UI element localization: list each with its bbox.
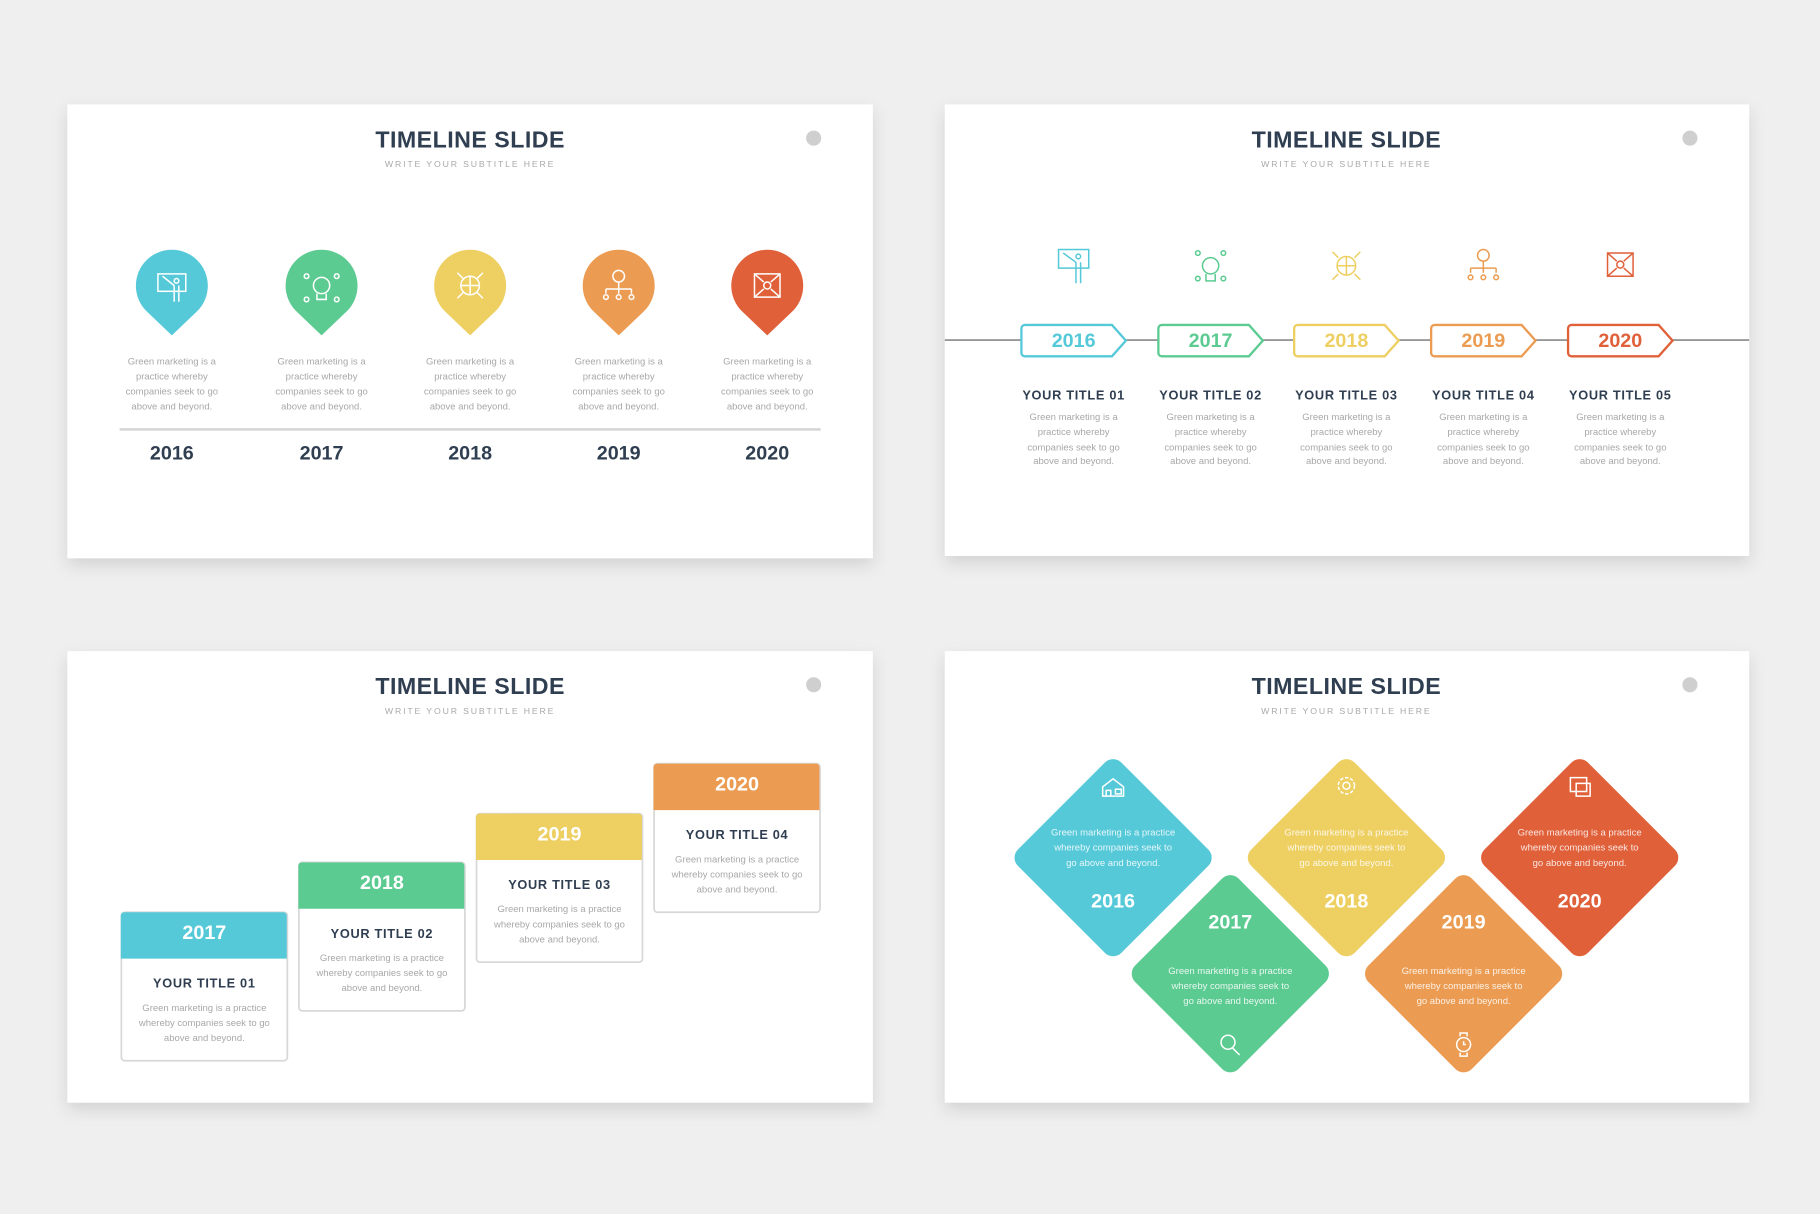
- step 2017: whereby companies seek to go: [138, 1018, 270, 1029]
- titles and descriptions: practice whereby: [1310, 427, 1383, 438]
- years: 2020: [745, 443, 789, 465]
- step 2019: Green marketing is a practice: [497, 904, 622, 915]
- descriptions: Green marketing is a: [575, 356, 663, 367]
- descriptions: above and beyond.: [430, 402, 511, 413]
- step 2019: YOUR TITLE 03: [508, 877, 611, 892]
- descriptions: companies seek to go: [424, 387, 516, 398]
- step 2017: 2017: [182, 922, 226, 944]
- diamond 2017: [1127, 870, 1334, 1077]
- step 2017: [121, 912, 287, 1061]
- panel: arrow tag timeline: 2020: [1598, 330, 1642, 352]
- diamond 2019: [1360, 870, 1567, 1077]
- year tags: [1021, 325, 1673, 356]
- pin 2018: [434, 250, 506, 335]
- step 2020: above and beyond.: [697, 885, 777, 896]
- titles and descriptions: Green marketing is a: [1167, 412, 1255, 423]
- descriptions: Green marketing is a: [426, 356, 515, 367]
- step 2019: above and beyond.: [519, 934, 600, 945]
- page number: [1682, 131, 1697, 146]
- titles and descriptions: Green marketing is a: [1439, 412, 1528, 423]
- subtitle: WRITE YOUR SUBTITLE HERE: [1261, 159, 1432, 169]
- titles and descriptions: Green marketing is a: [1302, 412, 1391, 423]
- titles and descriptions: companies seek to go: [1164, 442, 1257, 453]
- years: [150, 443, 789, 465]
- titles and descriptions: above and beyond.: [1033, 456, 1114, 467]
- titles and descriptions: YOUR TITLE 05: [1569, 387, 1672, 402]
- step 2019: [476, 814, 642, 962]
- titles and descriptions: companies seek to go: [1437, 442, 1530, 453]
- diamond 2017: whereby companies seek to: [1170, 981, 1289, 992]
- diamond 2019: go above and beyond.: [1417, 996, 1511, 1007]
- panel: arrow tag timeline: [945, 104, 1749, 556]
- descriptions: [126, 356, 813, 413]
- title: TIMELINE SLIDE: [375, 673, 565, 699]
- step 2018: [298, 862, 465, 1011]
- descriptions: Green marketing is a: [723, 356, 812, 367]
- step 2018: YOUR TITLE 02: [331, 926, 433, 941]
- years: 2016: [150, 443, 194, 465]
- title: TIMELINE SLIDE: [1252, 673, 1441, 699]
- descriptions: companies seek to go: [275, 387, 368, 398]
- panel: diamond timeline: [945, 651, 1749, 1103]
- diamond 2016: [1010, 754, 1217, 961]
- panel: arrow tag timeline: 2016: [1052, 330, 1096, 352]
- diamond 2020: go above and beyond.: [1533, 858, 1627, 869]
- step 2020: [654, 764, 820, 912]
- title: TIMELINE SLIDE: [375, 126, 565, 152]
- step 2017: YOUR TITLE 01: [153, 976, 256, 991]
- title: TIMELINE SLIDE: [1252, 126, 1441, 152]
- descriptions: companies seek to go: [126, 387, 218, 398]
- titles and descriptions: above and beyond.: [1443, 456, 1524, 467]
- descriptions: practice whereby: [434, 372, 506, 383]
- diamond 2018: whereby companies seek to: [1287, 843, 1405, 854]
- descriptions: practice whereby: [286, 372, 358, 383]
- diamond 2020: [1476, 754, 1683, 961]
- step 2017: above and beyond.: [164, 1033, 245, 1044]
- pin 2017: [286, 250, 358, 335]
- titles and descriptions: YOUR TITLE 04: [1432, 387, 1535, 402]
- titles and descriptions: practice whereby: [1584, 427, 1656, 438]
- diamond 2020: Green marketing is a practice: [1518, 828, 1642, 839]
- titles and descriptions: YOUR TITLE 02: [1159, 387, 1262, 402]
- step 2018: above and beyond.: [342, 983, 422, 994]
- pin 2020: [731, 250, 803, 335]
- pin 2016: [136, 250, 208, 335]
- panel: arrow tag timeline: 2019: [1461, 330, 1505, 352]
- titles and descriptions: YOUR TITLE 03: [1295, 387, 1398, 402]
- step 2019: whereby companies seek to go: [493, 919, 625, 930]
- diamond 2016: Green marketing is a practice: [1051, 828, 1175, 839]
- page number: [806, 131, 821, 146]
- descriptions: companies seek to go: [572, 387, 665, 398]
- diamond 2019: 2019: [1442, 911, 1486, 933]
- titles and descriptions: above and beyond.: [1306, 456, 1387, 467]
- diamond 2016: go above and beyond.: [1066, 858, 1160, 869]
- step 2019: 2019: [538, 823, 581, 845]
- descriptions: Green marketing is a: [277, 356, 366, 367]
- titles and descriptions: Green marketing is a: [1576, 412, 1665, 423]
- descriptions: companies seek to go: [721, 387, 813, 398]
- subtitle: WRITE YOUR SUBTITLE HERE: [1261, 706, 1432, 716]
- years: 2019: [597, 443, 641, 465]
- diamond 2018: [1243, 754, 1450, 961]
- diamond 2020: whereby companies seek to: [1520, 843, 1639, 854]
- panel: pin timeline: [67, 104, 873, 558]
- page number: [1682, 677, 1697, 692]
- titles and descriptions: companies seek to go: [1027, 442, 1120, 453]
- diamond 2016: 2016: [1091, 891, 1135, 913]
- titles and descriptions: practice whereby: [1175, 427, 1247, 438]
- diamond 2018: go above and beyond.: [1299, 858, 1393, 869]
- descriptions: above and beyond.: [727, 402, 808, 413]
- years: 2017: [300, 443, 344, 465]
- years: 2018: [448, 443, 492, 465]
- titles and descriptions: YOUR TITLE 01: [1022, 387, 1125, 402]
- panel: arrow tag timeline: 2018: [1324, 330, 1368, 352]
- diamond 2020: 2020: [1558, 891, 1602, 913]
- step 2018: 2018: [360, 872, 404, 894]
- diamond 2017: Green marketing is a practice: [1168, 966, 1292, 977]
- titles and descriptions: companies seek to go: [1574, 442, 1667, 453]
- descriptions: practice whereby: [583, 372, 655, 383]
- diamond 2018: 2018: [1324, 891, 1368, 913]
- titles and descriptions: practice whereby: [1447, 427, 1519, 438]
- pin 2019: [583, 250, 655, 335]
- page number: [806, 677, 821, 692]
- panel: staircase timeline: [67, 651, 873, 1103]
- titles and descriptions: companies seek to go: [1300, 442, 1393, 453]
- descriptions: above and beyond.: [281, 402, 362, 413]
- icons row: [1059, 250, 1633, 283]
- step 2020: Green marketing is a practice: [675, 854, 799, 865]
- step 2018: whereby companies seek to go: [315, 968, 447, 979]
- diamond 2019: Green marketing is a practice: [1402, 966, 1526, 977]
- step 2020: whereby companies seek to go: [671, 869, 803, 880]
- subtitle: WRITE YOUR SUBTITLE HERE: [385, 159, 555, 169]
- diamond 2019: whereby companies seek to: [1404, 981, 1522, 992]
- titles and descriptions: above and beyond.: [1580, 456, 1661, 467]
- diamond 2017: 2017: [1208, 911, 1252, 933]
- panel: arrow tag timeline: 2017: [1189, 330, 1233, 352]
- titles and descriptions: [1022, 387, 1672, 467]
- diamond 2016: whereby companies seek to: [1053, 843, 1172, 854]
- subtitle: WRITE YOUR SUBTITLE HERE: [385, 706, 555, 716]
- descriptions: above and beyond.: [578, 402, 659, 413]
- step 2020: 2020: [715, 773, 759, 795]
- titles and descriptions: Green marketing is a: [1030, 412, 1118, 423]
- descriptions: practice whereby: [731, 372, 803, 383]
- descriptions: above and beyond.: [131, 402, 212, 413]
- diamond 2017: go above and beyond.: [1183, 996, 1277, 1007]
- step 2018: Green marketing is a practice: [320, 953, 444, 964]
- descriptions: practice whereby: [136, 372, 208, 383]
- step 2017: Green marketing is a practice: [142, 1003, 266, 1014]
- titles and descriptions: above and beyond.: [1170, 456, 1251, 467]
- titles and descriptions: practice whereby: [1038, 427, 1110, 438]
- descriptions: Green marketing is a: [128, 356, 217, 367]
- diamond 2018: Green marketing is a practice: [1284, 828, 1408, 839]
- step 2020: YOUR TITLE 04: [686, 827, 789, 842]
